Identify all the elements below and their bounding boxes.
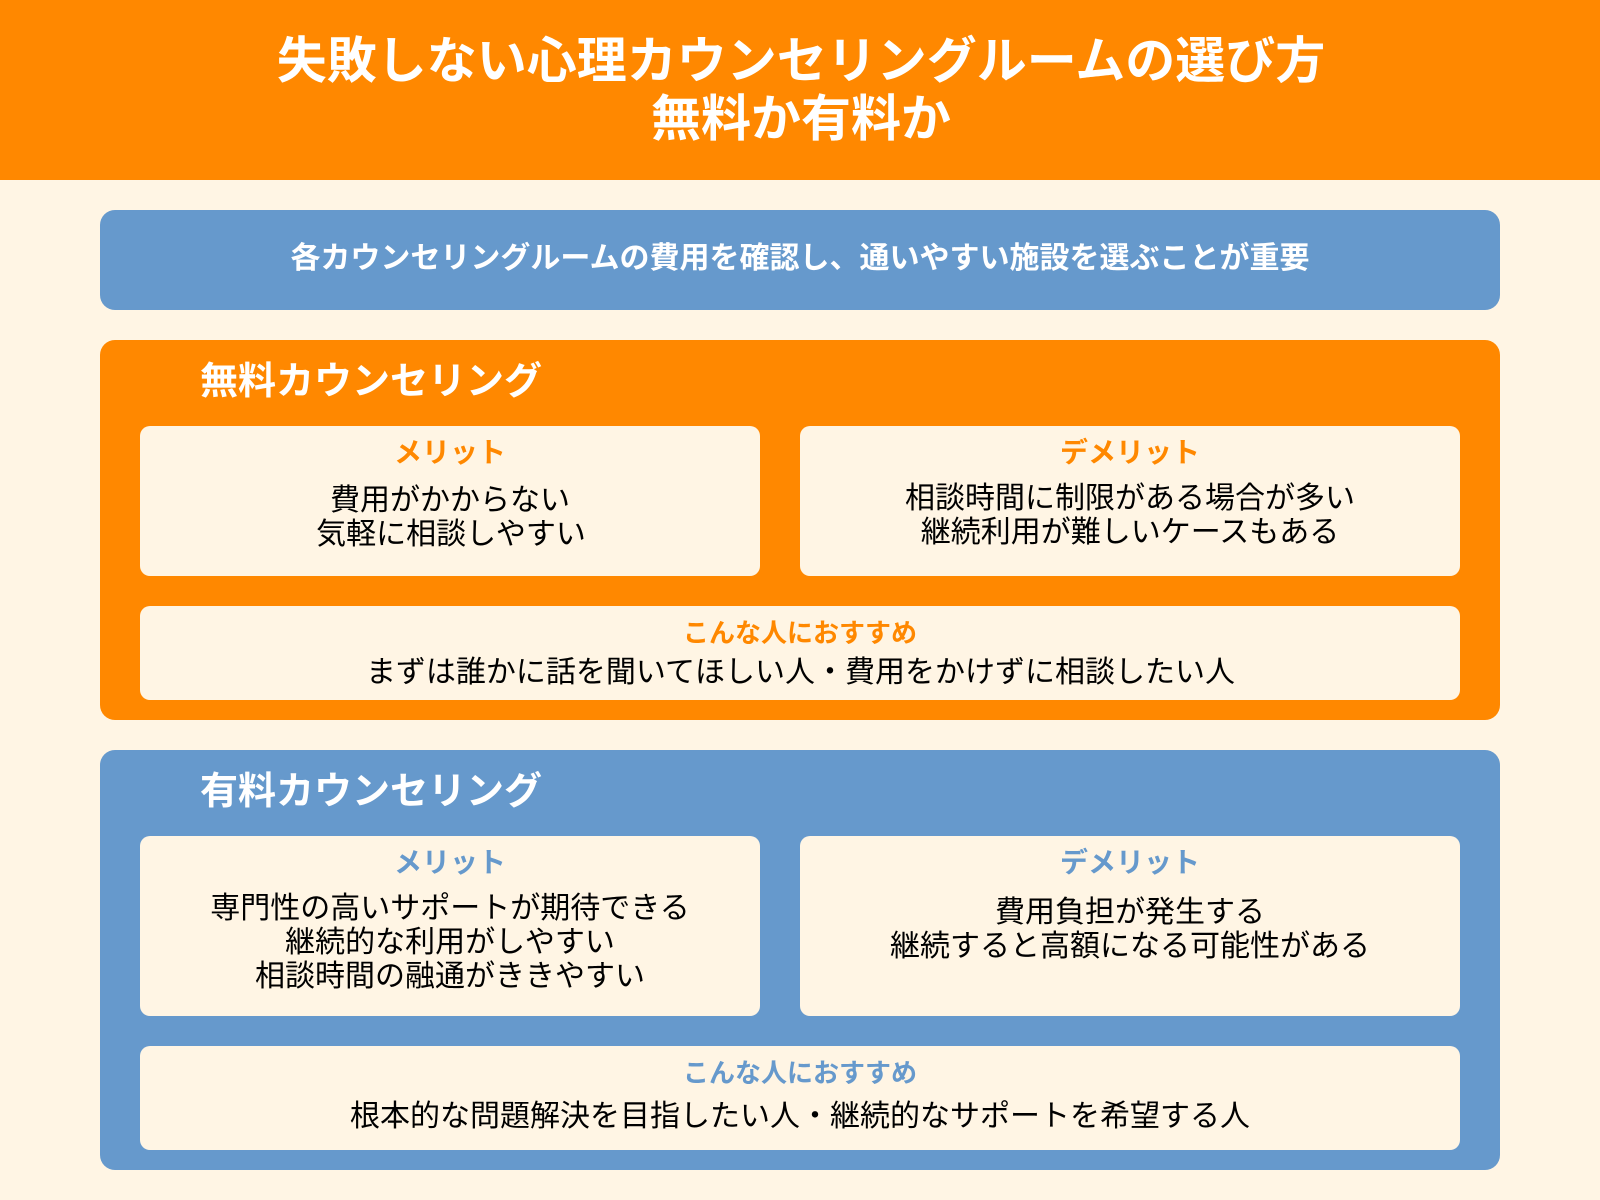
merits text	[316, 484, 586, 551]
demerits text: 費用負担が発生する	[995, 896, 1265, 929]
card: paid recommended	[140, 1046, 1460, 1150]
demerits label: デメリット	[1060, 847, 1200, 878]
summary banner	[100, 210, 1500, 310]
title: 無料か有料か	[651, 91, 951, 147]
demerits text: 相談時間に制限がある場合が多い	[905, 482, 1355, 515]
heading: free counseling: 無料カウンセリング	[200, 361, 542, 403]
card: free demerits	[800, 426, 1460, 576]
card: paid merits: 相談時間の融通がききやすい	[255, 960, 645, 993]
card: free merits	[140, 426, 760, 576]
title	[277, 33, 1325, 147]
header band	[0, 0, 1600, 180]
card: paid demerits: 継続すると高額になる可能性がある	[890, 930, 1370, 963]
card: free merits: 気軽に相談しやすい	[316, 518, 586, 551]
card: free recommended	[140, 606, 1460, 700]
card: paid merits: 継続的な利用がしやすい	[285, 926, 615, 959]
merits text: 費用がかからない	[330, 484, 570, 517]
merits label: メリット	[394, 437, 506, 468]
summary banner: 各カウンセリングルームの費用を確認し、通いやすい施設を選ぶことが重要	[290, 242, 1310, 275]
demerits text	[905, 482, 1355, 549]
recommended label: こんな人におすすめ	[683, 1058, 917, 1088]
recommended text: 根本的な問題解決を目指したい人・継続的なサポートを希望する人	[350, 1100, 1250, 1133]
demerits label: デメリット	[1060, 437, 1200, 468]
demerits text	[890, 896, 1370, 963]
merits label: メリット	[394, 847, 506, 878]
title: 失敗しない心理カウンセリングルームの選び方	[277, 33, 1325, 89]
recommended label: こんな人におすすめ	[683, 618, 917, 648]
recommended text: まずは誰かに話を聞いてほしい人・費用をかけずに相談したい人	[366, 656, 1235, 689]
card: paid merits	[140, 836, 760, 1016]
card: paid demerits	[800, 836, 1460, 1016]
merits text	[210, 892, 690, 993]
panel: paid counseling	[100, 750, 1500, 1170]
panel: free counseling	[100, 340, 1500, 720]
heading: paid counseling: 有料カウンセリング	[200, 771, 542, 813]
card: free demerits: 継続利用が難しいケースもある	[921, 516, 1339, 549]
merits text: 専門性の高いサポートが期待できる	[210, 892, 690, 925]
